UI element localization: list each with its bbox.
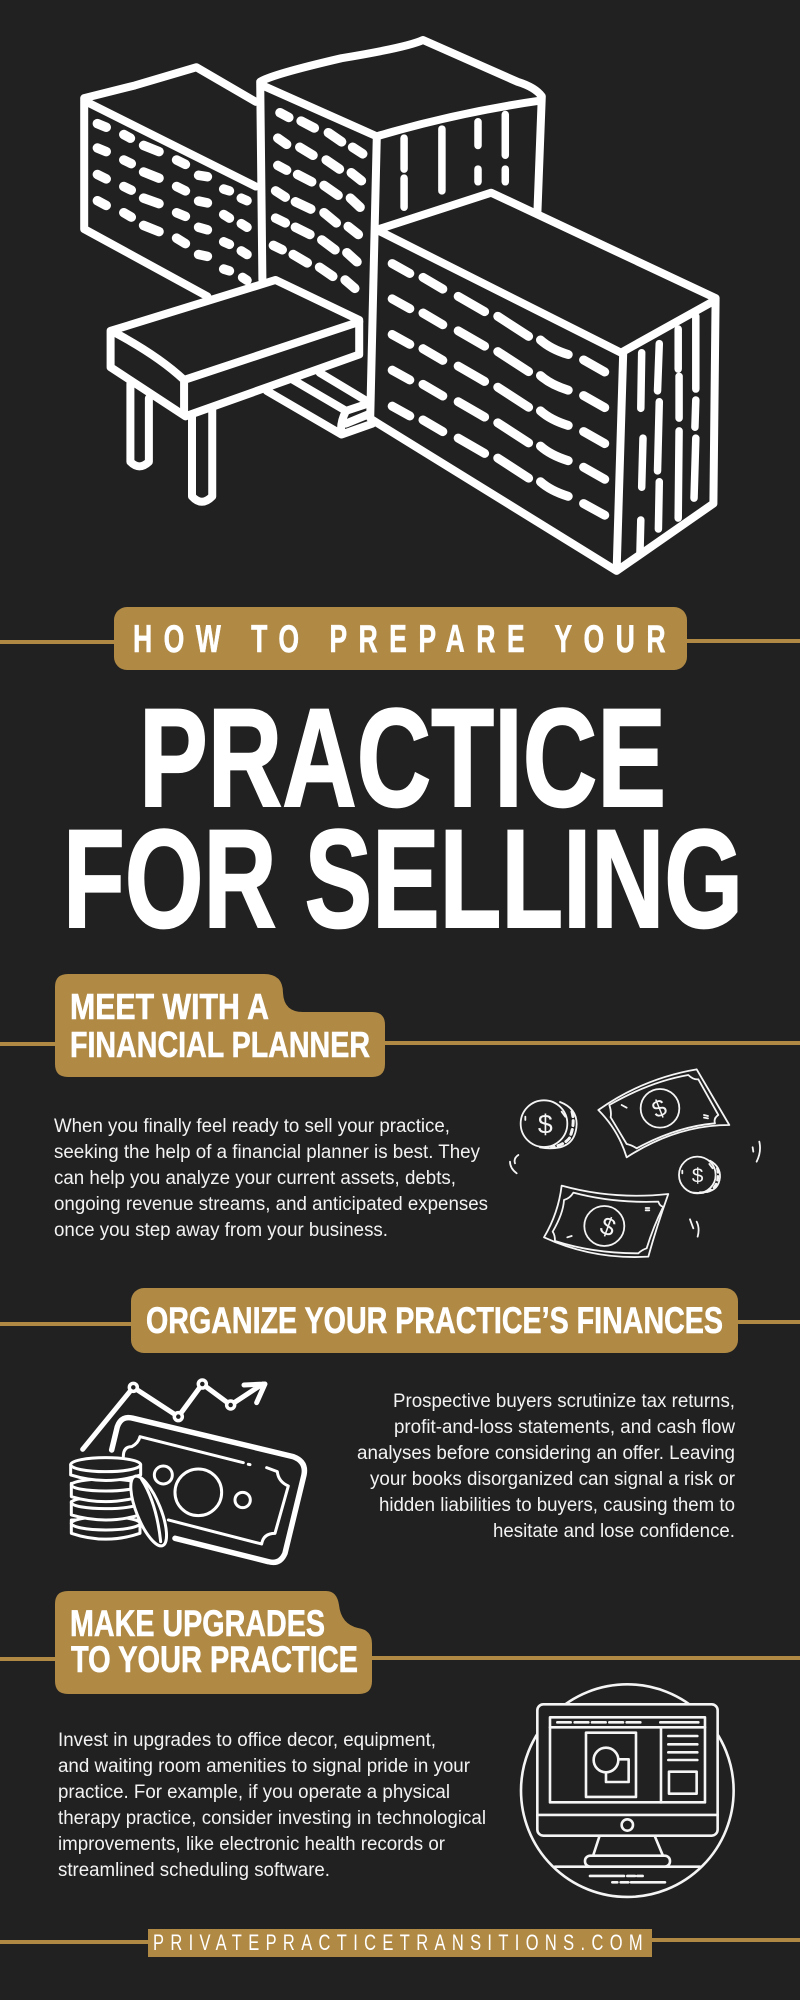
front building outline	[372, 193, 716, 571]
section heading tag: MAKE UPGRADES	[70, 1603, 325, 1644]
icon: falling money	[510, 1069, 760, 1257]
body text	[54, 1116, 488, 1241]
body text: and waiting room amenities to signal pride in your	[58, 1756, 471, 1777]
banknote upper	[598, 1069, 729, 1157]
banknote lower	[544, 1186, 668, 1257]
body text: can help you analyze your current assets, debts,	[54, 1168, 456, 1189]
body text: hidden liabilities to buyers, causing them to	[379, 1495, 735, 1516]
body text: practice. For example, if you operate a physical	[58, 1782, 450, 1803]
section heading tag	[55, 1591, 372, 1694]
motion marks	[510, 1142, 760, 1237]
body text	[58, 1730, 486, 1881]
banknote	[112, 1418, 304, 1562]
coin stack	[71, 1458, 141, 1539]
body text: seeking the help of a financial planner is best. They	[54, 1142, 480, 1163]
body text: once you step away from your business.	[54, 1220, 388, 1241]
growth line with arrow	[83, 1380, 265, 1449]
title	[63, 679, 743, 957]
body text: profit-and-loss statements, and cash flow	[394, 1417, 735, 1438]
coin small: $	[692, 1165, 704, 1188]
body text: therapy practice, consider investing in technological	[58, 1808, 486, 1829]
section heading tag: MEET WITH A	[70, 986, 269, 1027]
front building windows	[392, 264, 605, 515]
icon: money, coins and growth chart	[71, 1380, 304, 1562]
banknote upper: $	[648, 1094, 671, 1124]
left building windows	[97, 124, 247, 280]
coin large	[521, 1100, 577, 1148]
icon: desktop computer in circle	[521, 1684, 734, 1897]
section heading tag	[55, 974, 385, 1077]
body text: Prospective buyers scrutinize tax returns,	[393, 1391, 735, 1412]
footer url bar: PRIVATEPRACTICETRANSITIONS.COM	[153, 1930, 649, 1955]
middle building outline	[260, 40, 542, 418]
panel: meet with a financial planner	[54, 974, 760, 1257]
leaning coin	[124, 1472, 174, 1550]
body text: your books disorganized can signal a risk or	[370, 1469, 736, 1490]
table top	[111, 280, 359, 416]
section heading tag	[131, 1288, 738, 1353]
monitor	[537, 1704, 718, 1836]
illustration: isometric office buildings	[84, 40, 716, 571]
left building outline	[84, 67, 256, 296]
middle building windows	[273, 113, 363, 288]
panel: organize your practice's finances	[71, 1288, 738, 1562]
section heading tag: FINANCIAL PLANNER	[70, 1024, 370, 1065]
body text: ongoing revenue streams, and anticipated expenses	[54, 1194, 488, 1215]
stand	[555, 1837, 700, 1882]
body text	[357, 1391, 736, 1542]
body text: When you finally feel ready to sell your practice,	[54, 1116, 450, 1137]
coin small	[679, 1157, 720, 1193]
banknote lower: $	[596, 1212, 619, 1243]
small lower slab	[267, 373, 372, 435]
section heading tag: TO YOUR PRACTICE	[71, 1639, 358, 1680]
body text: improvements, like electronic health records or	[58, 1834, 446, 1855]
body text: streamlined scheduling software.	[58, 1860, 330, 1881]
table legs	[130, 384, 212, 502]
body text: Invest in upgrades to office decor, equipment,	[58, 1730, 436, 1751]
panel: make upgrades to your practice	[55, 1591, 734, 1897]
body text: analyses before considering an offer. Leaving	[357, 1443, 735, 1464]
body text: hesitate and lose confidence.	[493, 1521, 735, 1542]
coin large: $	[538, 1109, 553, 1139]
heading tag: how to prepare your	[114, 607, 687, 670]
screen	[550, 1717, 705, 1802]
